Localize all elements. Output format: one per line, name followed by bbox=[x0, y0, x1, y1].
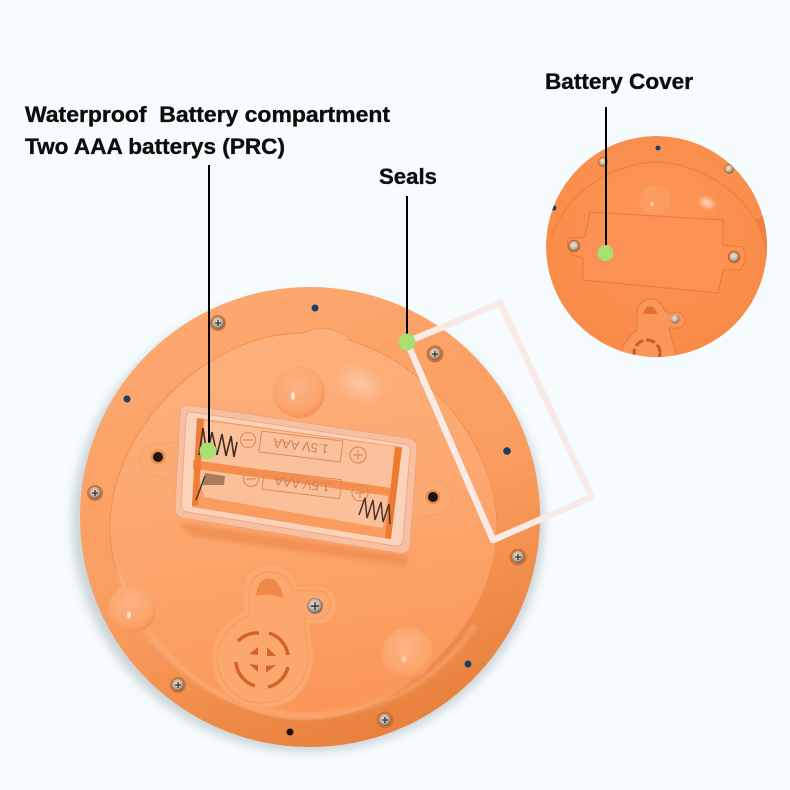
battery cover plate bbox=[567, 212, 746, 293]
top bump bbox=[273, 366, 325, 418]
flange screws bbox=[87, 315, 526, 728]
flange blue dots bbox=[124, 304, 511, 736]
speaker tab bbox=[619, 299, 685, 358]
seal inner stripe bbox=[181, 412, 410, 546]
compartment shadow below rim bbox=[178, 522, 408, 566]
lower battery bed bbox=[197, 469, 388, 528]
right wall bbox=[385, 447, 402, 539]
upper AAA label: 1.5V AAA bbox=[272, 435, 330, 457]
dome lower light edge bbox=[118, 570, 475, 716]
divider bbox=[193, 460, 391, 496]
bottom right bump bbox=[382, 628, 434, 680]
speaker cover bbox=[212, 564, 337, 708]
title: seals: Seals bbox=[379, 164, 437, 189]
contact plate bbox=[203, 473, 225, 485]
minus and plus marks bbox=[240, 432, 368, 501]
upper spring bbox=[199, 428, 237, 457]
rim screws bbox=[598, 158, 608, 166]
right side shadow bbox=[756, 216, 767, 261]
leader: seals bbox=[398, 196, 416, 350]
inner dome bbox=[110, 333, 497, 720]
seal rim bbox=[175, 405, 417, 553]
battery compartment bbox=[175, 405, 417, 553]
leader: battery compartment bbox=[200, 165, 216, 460]
left ear with hole bbox=[140, 442, 180, 482]
upper battery bed bbox=[196, 420, 396, 488]
upper AAA label bbox=[259, 431, 343, 462]
top hump on dome line bbox=[303, 328, 352, 340]
highlight bbox=[699, 196, 715, 210]
rim line bbox=[552, 162, 757, 236]
top bump bbox=[640, 185, 670, 215]
lower AAA label: 1.5V AAA bbox=[273, 473, 331, 495]
lower AAA label bbox=[262, 470, 342, 499]
right ear with hole bbox=[410, 480, 451, 518]
title: waterproof battery compartment: Waterproof Battery compartment bbox=[25, 102, 391, 127]
title: two AAA batteries: Two AAA batterys (PRC) bbox=[25, 134, 285, 159]
seal highlight frame bbox=[407, 303, 592, 540]
outer flange bbox=[80, 287, 540, 747]
bottom left bump bbox=[108, 585, 156, 633]
dome highlight bbox=[340, 369, 380, 399]
inner cavity bbox=[192, 418, 402, 539]
lower spring bbox=[359, 498, 390, 524]
drop shadow bbox=[72, 294, 544, 752]
product: main orange device bbox=[72, 287, 544, 752]
cover screws bbox=[568, 240, 580, 252]
title: battery cover: Battery Cover bbox=[545, 69, 693, 94]
inset: battery cover view bbox=[546, 136, 772, 366]
leader: battery cover bbox=[598, 107, 614, 261]
left wall bbox=[192, 418, 204, 506]
